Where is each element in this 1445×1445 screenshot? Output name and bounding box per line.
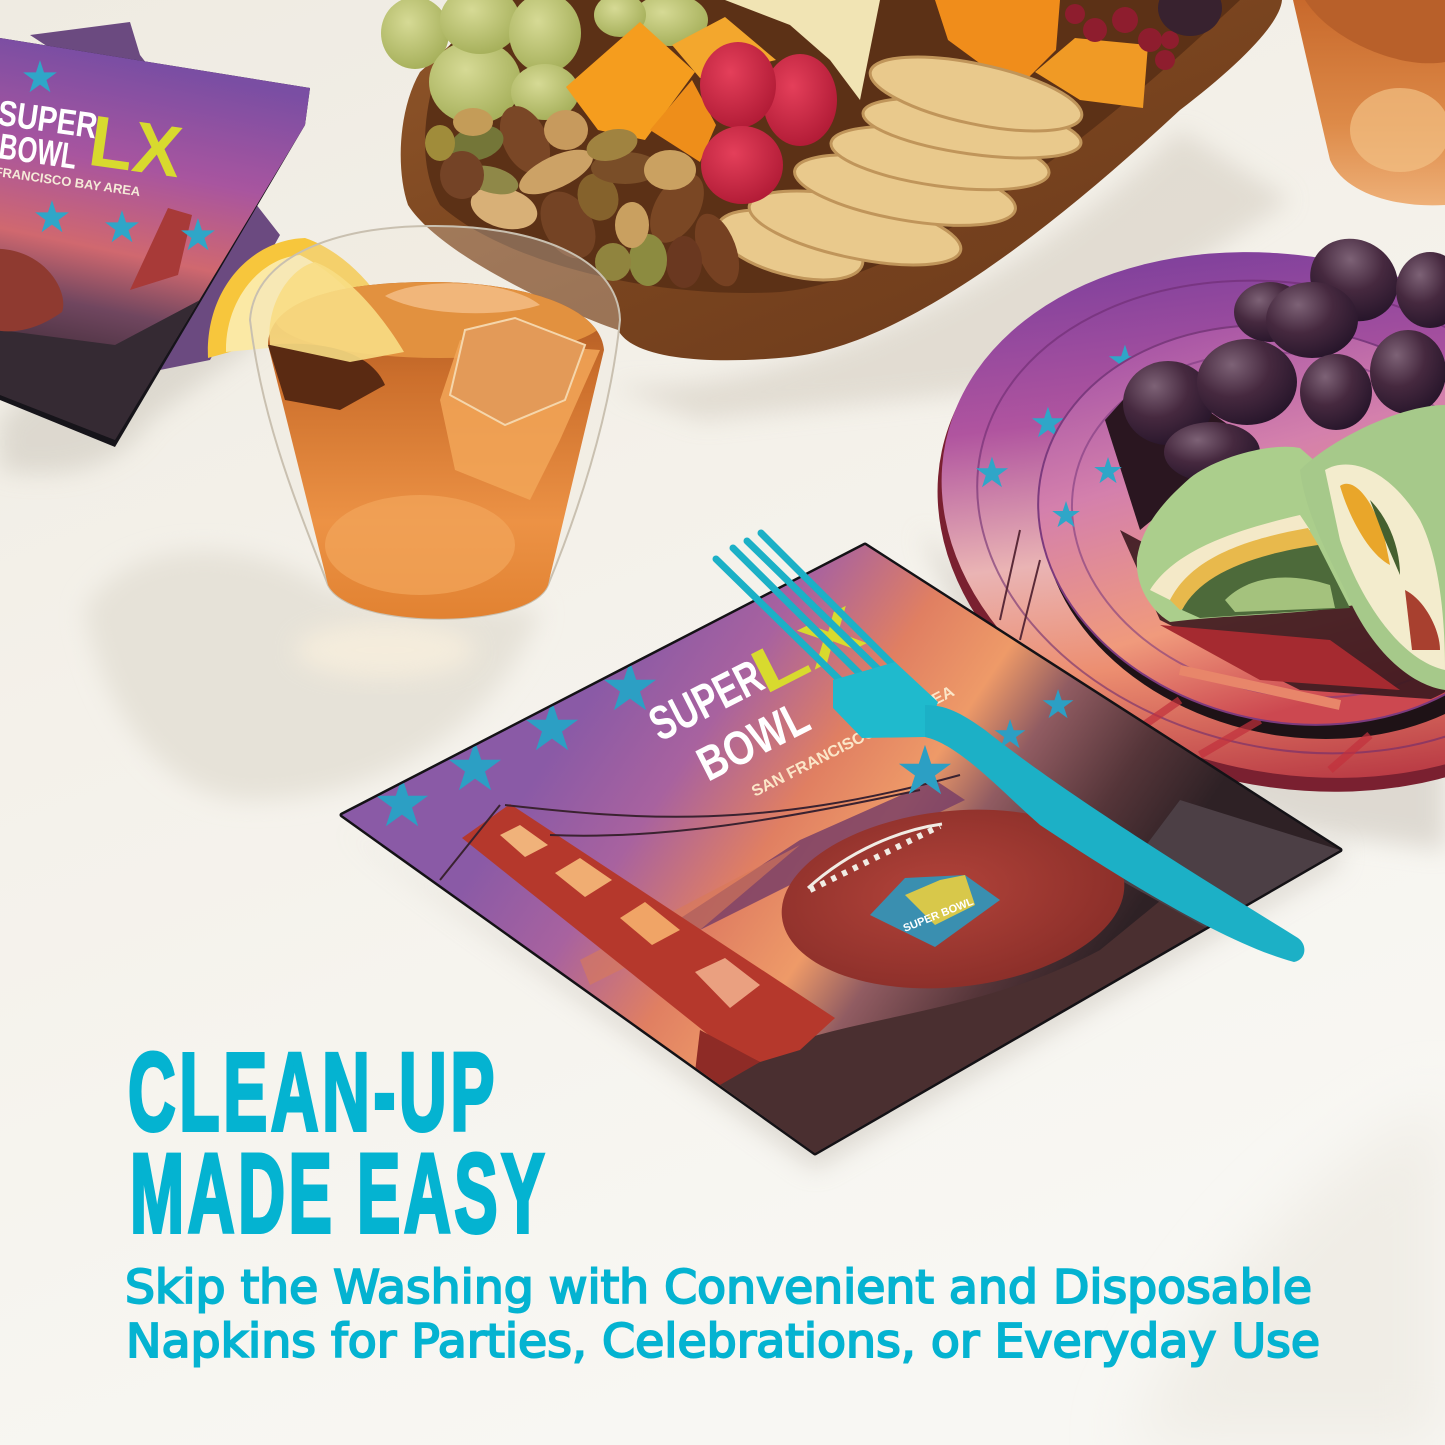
football [773, 794, 1133, 1004]
back napkin top left [30, 22, 280, 372]
small paper plate [1037, 325, 1445, 726]
center napkin logo text: BOWL [689, 691, 818, 792]
center napkin logo text: SAN FRANCISCO BAY AREA [749, 683, 958, 801]
cheese cubes [566, 0, 1148, 162]
stars on center napkin: ★ [445, 729, 505, 805]
stars on top left napkin [23, 60, 215, 250]
stars on center napkin: ★ [1040, 683, 1076, 727]
stars on center napkin: ★ [372, 765, 432, 841]
glass body [250, 226, 620, 619]
stars on center napkin: ★ [992, 713, 1028, 757]
stars on center napkin [377, 666, 1074, 826]
stars on top left napkin: ★ [178, 211, 218, 260]
food on board [381, 0, 1222, 293]
subheading [125, 1260, 1320, 1368]
subheading: Skip the Washing with Convenient and Disposable [125, 1260, 1312, 1314]
wooden serving board [401, 0, 1282, 360]
subheading: Napkins for Parties, Celebrations, or Everyday Use [126, 1314, 1320, 1368]
stars on center napkin: ★ [522, 689, 582, 765]
small paper plate: ★ [1050, 494, 1082, 535]
center napkin logo text [641, 594, 958, 801]
logo text top left napkin: BOWL [0, 125, 80, 177]
logo text top left napkin: LX [84, 101, 187, 193]
plate stars: ★ [1106, 337, 1144, 384]
teal plastic fork [716, 533, 1304, 962]
mixed nuts [425, 98, 748, 292]
lemon slice [208, 238, 406, 362]
plate stars: ★ [1029, 399, 1067, 446]
golden gate bridge [440, 775, 960, 1085]
tea liquid [268, 282, 604, 619]
stars on center napkin: ★ [600, 649, 660, 725]
plate stars: ★ [973, 449, 1011, 496]
center napkin logo text: LX [740, 594, 874, 707]
ice cube [450, 318, 585, 425]
tea surface [385, 283, 540, 313]
dark foreground hills [713, 902, 1206, 1152]
cranberries [1065, 4, 1179, 70]
brie wedge [725, 0, 880, 100]
center napkin [340, 542, 1342, 1156]
plate stars [973, 337, 1144, 496]
large paper plate [887, 189, 1445, 855]
center napkin logo text: SUPER [641, 650, 772, 752]
red grapes [1123, 223, 1445, 482]
napkin stack top left [0, 38, 310, 447]
crackers [710, 42, 1088, 293]
green grapes [381, 0, 708, 124]
plate stripes [1130, 700, 1370, 770]
headline: CLEAN-UP [128, 1031, 498, 1154]
glass of iced tea with lemon [208, 226, 640, 630]
raspberries [700, 42, 837, 204]
small paper plate: ★ [1092, 450, 1124, 491]
veggie wraps [1137, 405, 1445, 690]
logo text top left napkin [0, 100, 182, 196]
stars on top left napkin: ★ [20, 53, 60, 102]
top right glass of tea [1293, 0, 1445, 205]
stars on top left napkin: ★ [32, 193, 72, 242]
headline: MADE EASY [130, 1131, 548, 1256]
stars on top left napkin: ★ [102, 203, 142, 252]
stars on center napkin: ★ [895, 733, 955, 809]
football logo [870, 875, 1000, 947]
football: SUPER BOWL [902, 896, 976, 935]
lemon in glass [269, 262, 404, 362]
distant ridge [670, 780, 965, 930]
headline [128, 1031, 548, 1256]
